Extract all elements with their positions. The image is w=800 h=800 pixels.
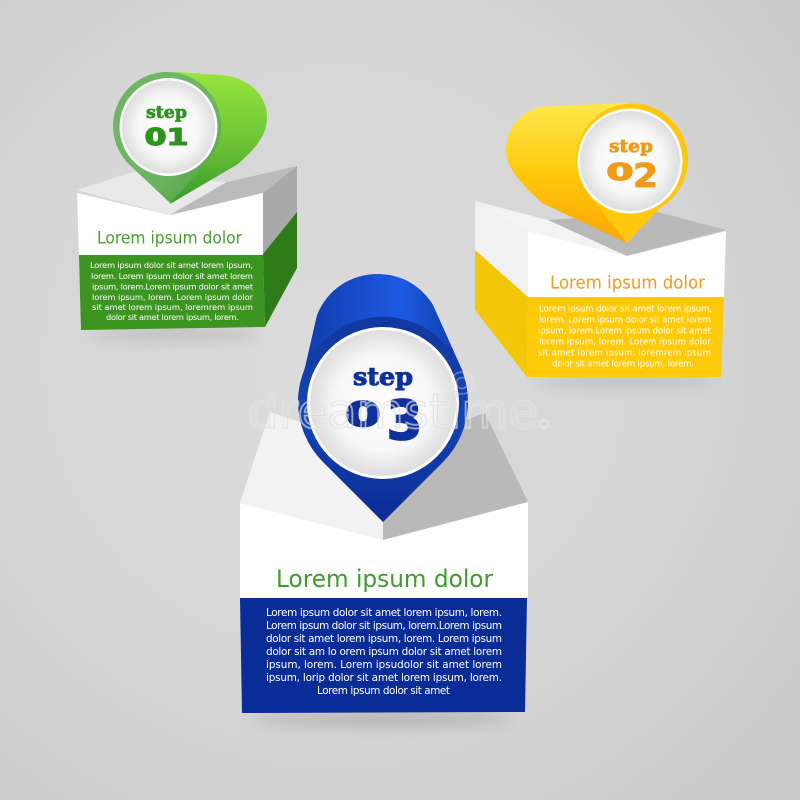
panel: step 03 blue box (240, 412, 528, 727)
label: step 02: 0 (606, 158, 634, 186)
label: step 03: 3 (387, 390, 422, 452)
text block: step 03: Lorem ipsum dolor sit amet (317, 685, 450, 697)
text block: step 03: dolor sit am lo orem ipsum dolor sit amet lorem (266, 646, 502, 658)
watermark: dreamstime (248, 384, 538, 440)
text block: step 02: lorem. Lorem ipsum dolor sit amet lorem (539, 316, 711, 326)
text block: step 03: Lorem ipsum dolor sit amet lorem ipsum, lorem. (266, 607, 502, 619)
text block: step 02: dolor sit amet lorem ipsum, lorem. (552, 360, 694, 370)
text block: step 01: dolor sit amet lorem ipsum, lorem. (106, 312, 239, 322)
text block: step 03: Lorem ipsum dolor sit ipsum, lorem.Lorem ipsum (266, 620, 502, 632)
label: step 02: 2 (633, 158, 658, 196)
icon: step 03 blue pin (298, 274, 468, 522)
heading: step 03: Lorem ipsum dolor (276, 565, 493, 593)
text block: step 02: lorem ipsum, lorem. Lorem ipsum dolor (539, 338, 711, 348)
label: step 03: step (353, 362, 413, 391)
icon: step 02 yellow pin (506, 103, 688, 243)
text block: step 03: ipsum, lorip dolor sit amet lorem ipsum, lorem. (266, 672, 502, 684)
label: step 01: 1 (166, 124, 189, 151)
watermark: dreamstime (248, 384, 538, 440)
text block: step 02: sit amet lorem ipsum, loremrem ipsum (538, 348, 711, 358)
text block: step 03 (266, 607, 502, 697)
label: step 02: step (609, 136, 653, 157)
icon: step 01 green pin (113, 72, 267, 204)
text block: step 03: dolor sit amet lorem ipsum, lorem. Lorem ipsum (266, 633, 502, 645)
label: step 01: step (146, 103, 187, 123)
heading: step 01: Lorem ipsum dolor (97, 228, 242, 248)
panel: step 02 yellow box (475, 201, 726, 387)
label: step 02 (606, 136, 658, 196)
text block: step 01: sit amet lorem ipsum, loremrem ipsum (92, 302, 253, 312)
text block: step 03: ipsum, lorem. Lorem ipsudolor sit amet lorem (266, 659, 502, 671)
panel: step 01 green box (77, 166, 297, 340)
text block: step 01: lorem ipsum, lorem. Lorem ipsum dolor (92, 292, 254, 302)
label: step 03: 0 (345, 395, 381, 435)
text block: step 02: Lorem ipsum dolor sit amet lorem ipsum, (539, 304, 712, 314)
text block: step 02 (538, 304, 712, 370)
label: step 03 (345, 362, 422, 452)
text block: step 01: lorem. Lorem ipsum dolor sit amet lorem (91, 271, 253, 281)
heading: step 02: Lorem ipsum dolor (550, 274, 706, 294)
text block: step 01 (90, 260, 254, 322)
label: step 01 (145, 103, 189, 151)
text block: step 01: ipsum, lorem.Lorem ipsum dolor sit amet (92, 282, 254, 292)
text block: step 02: ipsum, lorem.Lorem ipsum dolor sit amet (538, 326, 712, 336)
label: step 01: 0 (145, 125, 166, 151)
text block: step 01: Lorem ipsum dolor sit amet lorem ipsum, (90, 260, 253, 270)
